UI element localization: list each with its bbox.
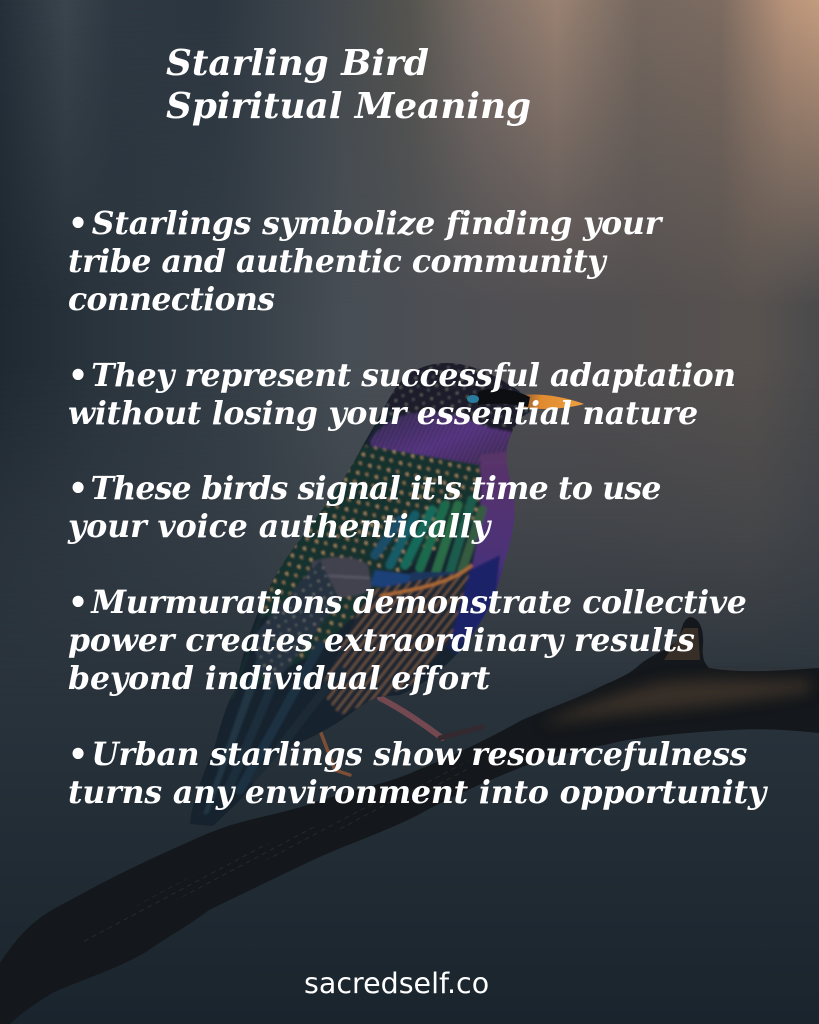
green and blue coverts — [375, 500, 482, 572]
neck purple — [370, 412, 512, 472]
back speckle area — [230, 445, 480, 700]
blue lower breast — [450, 555, 500, 640]
bullet: murmurations — [68, 584, 746, 697]
title — [166, 42, 531, 127]
title: Spiritual Meaning — [166, 85, 531, 127]
footer website: sacredself.co — [304, 967, 489, 1000]
body silhouette — [180, 355, 540, 835]
bullet: finding your tribe: tribe and authentic community — [68, 243, 605, 280]
bullet: adaptation — [68, 357, 736, 432]
bullet: use your voice — [67, 470, 661, 545]
bullet: finding your tribe: connections — [68, 281, 274, 318]
bullet: use your voice: • These birds signal it's time to use — [68, 470, 661, 507]
head — [388, 364, 517, 424]
bullet: adaptation: • They represent successful adaptation — [68, 357, 736, 394]
bullet: use your voice: your voice authentically — [68, 508, 490, 545]
branch — [0, 617, 819, 1024]
bullet: adaptation: without losing your essential nature — [68, 395, 698, 432]
primary and tail feathers — [198, 610, 340, 815]
bullet: finding your tribe — [68, 205, 664, 318]
bullet: urban starlings — [68, 736, 768, 811]
grey feathers — [312, 557, 372, 598]
breast — [446, 452, 515, 656]
bullet: murmurations: • Murmurations demonstrate collective — [68, 584, 746, 621]
title: Starling Bird — [166, 42, 429, 84]
bullet: murmurations: beyond individual effort — [68, 660, 490, 697]
bullet: murmurations: power creates extraordinary results — [68, 622, 695, 659]
eye — [467, 395, 479, 403]
bullet: finding your tribe: • Starlings symbolize finding your — [68, 205, 661, 242]
bullet: urban starlings: turns any environment into opportunity — [68, 774, 766, 811]
starling bird — [180, 355, 584, 835]
legs — [318, 698, 482, 775]
eye mask — [478, 389, 530, 407]
bullet: urban starlings: • Urban starlings show resourcefulness — [68, 736, 747, 773]
beak — [522, 395, 584, 409]
orange striped flight feathers — [320, 570, 472, 715]
